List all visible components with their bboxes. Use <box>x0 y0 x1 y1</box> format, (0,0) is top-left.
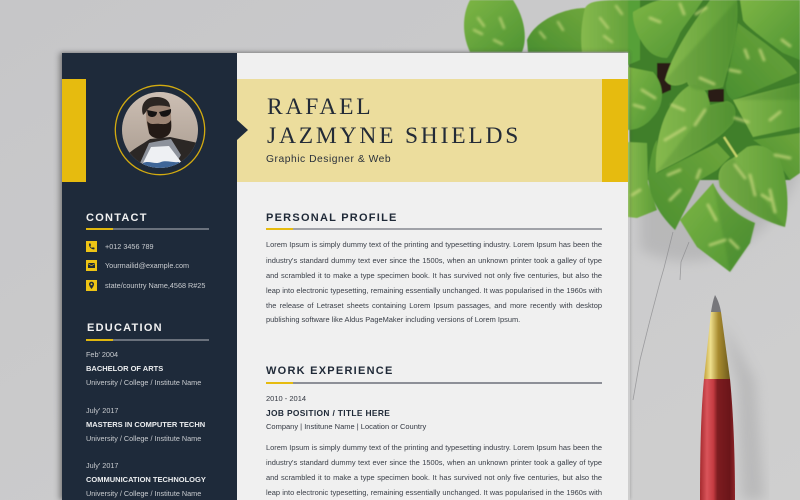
education entry 3: COMMUNICATION TECHNOLOGY <box>86 475 206 484</box>
icon: mail <box>86 260 97 271</box>
education entry 2: July' 2017 <box>86 406 118 415</box>
jacket <box>130 137 196 168</box>
marble cracks <box>633 232 689 400</box>
pen <box>700 295 765 500</box>
work experience divider <box>266 382 602 384</box>
education entry 1: University / College / Institute Name <box>86 378 201 387</box>
job description: industry's standard dummy text ever since the 1500s, when an unknown printer took a galley of type <box>266 458 602 467</box>
resume page <box>62 53 628 500</box>
contact section <box>86 212 209 291</box>
education section <box>86 322 209 498</box>
education entry 2: MASTERS IN COMPUTER TECHN <box>86 420 205 429</box>
work experience heading: WORK EXPERIENCE <box>266 365 394 377</box>
header band <box>237 79 602 182</box>
pen: red barrel <box>700 379 735 500</box>
blue shirt print <box>143 161 179 168</box>
personal profile paragraph <box>266 240 602 324</box>
hair <box>142 97 170 115</box>
postal address: state/country Name,4568 R#25 <box>105 281 205 290</box>
job description: and scrambled it to make a type specimen book. It has survived not only five centuries, but also the <box>266 473 602 482</box>
personal profile paragraph: the release of Letraset sheets containing Lorem Ipsum passages, and more recently with desktop <box>266 300 602 310</box>
shirt <box>142 146 181 168</box>
education heading: EDUCATION <box>87 322 163 334</box>
name heading: JAZMYNE SHIELDS <box>267 123 521 149</box>
sidebar pointer arrow <box>237 120 248 140</box>
personal profile paragraph: and scrambled it to make a type specimen book. It has survived not only five centuries, but also the <box>266 270 602 280</box>
profile photo <box>114 84 206 176</box>
education entry 3: University / College / Institute Name <box>86 489 201 498</box>
personal profile paragraph: leap into electronic typesetting, remaining essentially unchanged. It was popularised in the 1960s with <box>266 286 602 294</box>
name heading <box>267 94 521 149</box>
job description <box>266 443 602 496</box>
education entry 2: University / College / Institute Name <box>86 434 201 443</box>
face <box>146 105 172 131</box>
pen: gold cone <box>704 312 730 379</box>
email address: Yourmailid@example.com <box>105 261 189 270</box>
sunglasses <box>147 109 171 117</box>
plant: leaves behind the page <box>464 0 800 272</box>
personal profile divider <box>266 228 602 230</box>
plant <box>464 0 800 272</box>
header accent block right <box>602 79 628 182</box>
contact heading: CONTACT <box>86 212 148 224</box>
job company: Company | Institune Name | Location or Country <box>266 422 426 431</box>
icon: phone <box>86 241 97 252</box>
resume page shadow <box>62 53 630 500</box>
education entry 2 <box>86 406 205 443</box>
job description: Lorem Ipsum is simply dummy text of the printing and typesetting industry. Lorem Ipsum has been the <box>266 443 602 452</box>
education entry 1 <box>86 350 201 387</box>
job dates: 2010 - 2014 <box>266 394 306 402</box>
job title: JOB POSITION / TITLE HERE <box>266 408 390 418</box>
education entry 1: Feb' 2004 <box>86 350 118 359</box>
personal profile paragraph: publishing software like Aldus PageMaker including versions of Lorem Ipsum. <box>266 315 520 324</box>
job subtitle: Graphic Designer & Web <box>266 154 391 165</box>
education entry 3 <box>86 461 206 498</box>
personal profile paragraph: industry's standard dummy text ever since the 1500s, when an unknown printer took a galley of type <box>266 256 602 264</box>
pen: nib tip <box>711 295 721 312</box>
personal profile heading: PERSONAL PROFILE <box>266 212 398 224</box>
job description: leap into electronic typesetting, remaining essentially unchanged. It was popularised in the 1960s with <box>266 488 602 496</box>
education entry 3: July' 2017 <box>86 461 118 470</box>
plant: leaf shading <box>656 0 800 272</box>
sidebar panel <box>62 53 237 500</box>
name heading: RAFAEL <box>267 94 373 120</box>
personal profile paragraph: Lorem Ipsum is simply dummy text of the printing and typesetting industry. Lorem Ipsum has been the <box>266 240 602 249</box>
sidebar accent block left <box>62 79 86 182</box>
collar <box>140 139 181 167</box>
contact divider <box>86 228 209 230</box>
education entry 1: BACHELOR OF ARTS <box>86 364 163 373</box>
icon: location pin <box>86 280 97 291</box>
beard <box>147 120 171 138</box>
phone number: +012 3456 789 <box>105 242 154 251</box>
education divider <box>86 339 209 341</box>
plant: pale leaf variegation <box>474 4 790 248</box>
job entry <box>266 394 602 496</box>
